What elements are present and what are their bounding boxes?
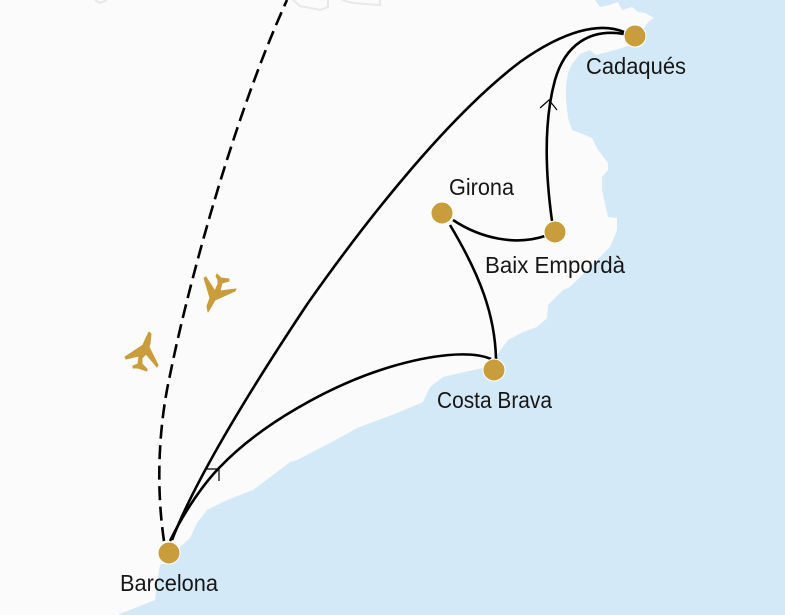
- label: Costa Brava: Costa Brava: [437, 387, 552, 413]
- label: Baix Empordà: Baix Empordà: [485, 252, 625, 278]
- route: dashed flight line: [159, 0, 287, 541]
- label: Cadaqués: Cadaqués: [586, 53, 686, 79]
- marker: Costa Brava: [483, 359, 505, 381]
- marker: Baix Empordà: [544, 221, 566, 243]
- label: Girona: Girona: [449, 174, 514, 200]
- arrow: north-east bound: [207, 469, 219, 481]
- marker: Girona: [431, 202, 453, 224]
- marker: Cadaqués: [624, 25, 646, 47]
- route: Baix Empordà to Cadaqués: [547, 33, 624, 221]
- route: Barcelona to Cadaqués: [172, 28, 624, 540]
- route: Girona to Baix Empordà: [453, 220, 545, 240]
- route: Costa Brava to Girona: [450, 225, 496, 359]
- label: Barcelona: Barcelona: [120, 570, 218, 596]
- icon: plane upper: [204, 274, 236, 312]
- icon: plane lower: [125, 332, 158, 371]
- marker: Barcelona: [158, 542, 180, 564]
- arrow: northbound: [540, 100, 557, 110]
- route: Barcelona to Costa Brava: [170, 354, 491, 541]
